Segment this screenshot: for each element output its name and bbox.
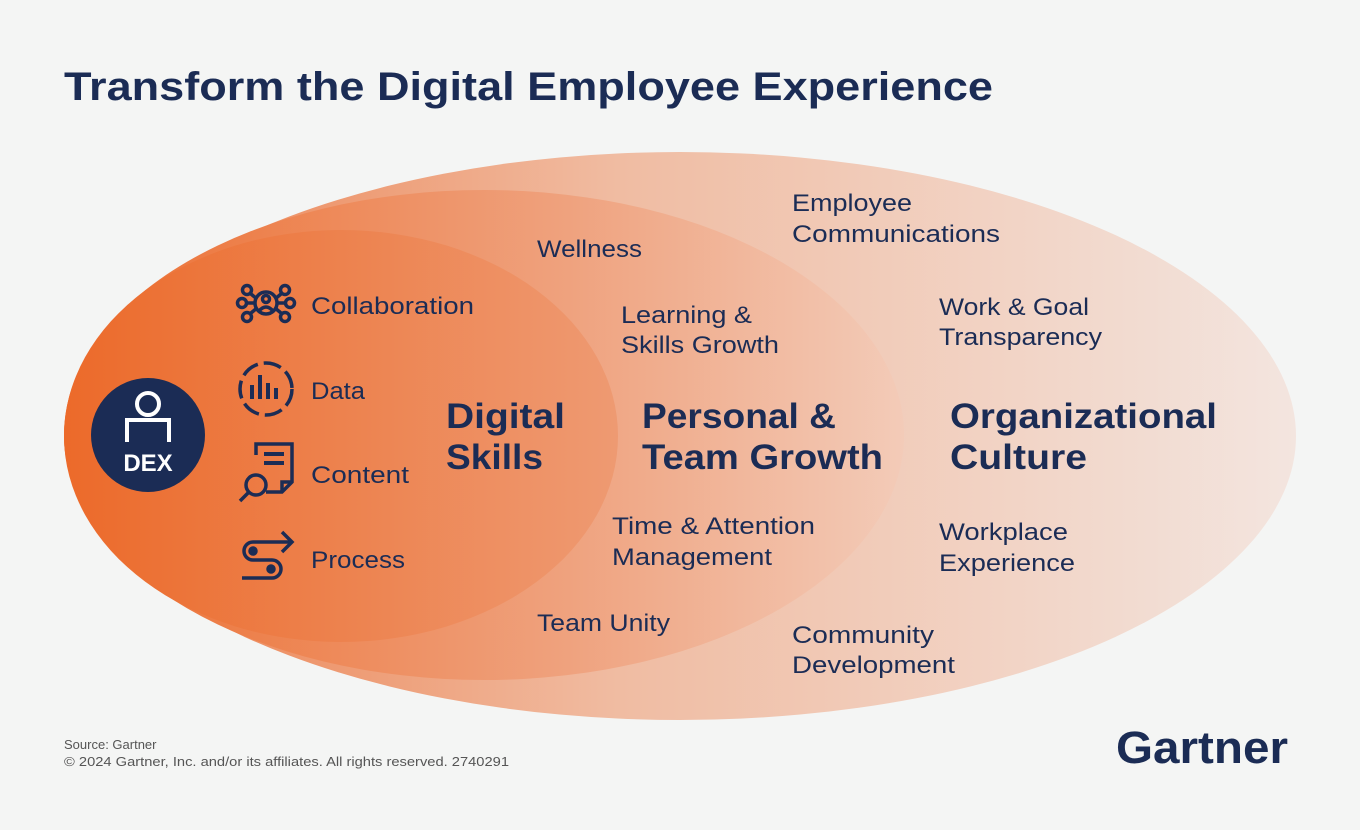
label: data: Data <box>311 378 366 405</box>
labels: personal & team growth: Skills Growth <box>621 332 779 359</box>
source note: Source: Gartner <box>64 737 157 752</box>
icon: DEX badge <box>91 378 205 492</box>
title: Transform the Digital Employee Experience <box>64 65 993 109</box>
icon: DEX badge: DEX <box>123 450 173 477</box>
ellipse: personal & team growth <box>64 190 904 680</box>
labels: organizational culture: Communications <box>792 221 1000 248</box>
ellipse: organizational culture <box>64 152 1296 720</box>
labels: organizational culture: Employee <box>792 190 912 217</box>
labels: organizational culture: Transparency <box>939 324 1102 351</box>
labels: organizational culture: Work & Goal <box>939 294 1089 321</box>
heading: digital skills: Skills <box>446 438 543 477</box>
labels: organizational culture <box>792 190 1102 679</box>
icon: data <box>240 363 292 415</box>
label: process: Process <box>311 547 405 574</box>
labels: personal & team growth: Management <box>612 544 772 571</box>
labels: personal & team growth: Team Unity <box>537 610 670 637</box>
labels: personal & team growth: Wellness <box>537 236 642 263</box>
icon: content <box>240 444 292 501</box>
heading: organizational culture: Organizational <box>950 397 1217 436</box>
icon: process <box>242 532 292 578</box>
heading: personal & team growth: Team Growth <box>642 438 883 477</box>
heading: organizational culture: Culture <box>950 438 1087 477</box>
labels: personal & team growth <box>537 236 815 637</box>
labels: organizational culture: Development <box>792 652 955 679</box>
icon: collaboration <box>238 286 294 322</box>
ellipse: digital skills <box>64 230 618 642</box>
labels: organizational culture: Community <box>792 622 934 649</box>
labels: personal & team growth: Time & Attention <box>612 513 815 540</box>
labels: personal & team growth: Learning & <box>621 302 752 329</box>
label: collaboration: Collaboration <box>311 293 474 320</box>
heading: digital skills: Digital <box>446 397 565 436</box>
label: content: Content <box>311 462 409 489</box>
labels: organizational culture: Experience <box>939 550 1075 577</box>
labels: organizational culture: Workplace <box>939 519 1068 546</box>
source note: © 2024 Gartner, Inc. and/or its affiliates. All rights reserved. 2740291 <box>64 754 509 769</box>
logo: Gartner: Gartner <box>1116 722 1288 773</box>
heading: personal & team growth: Personal & <box>642 397 836 436</box>
